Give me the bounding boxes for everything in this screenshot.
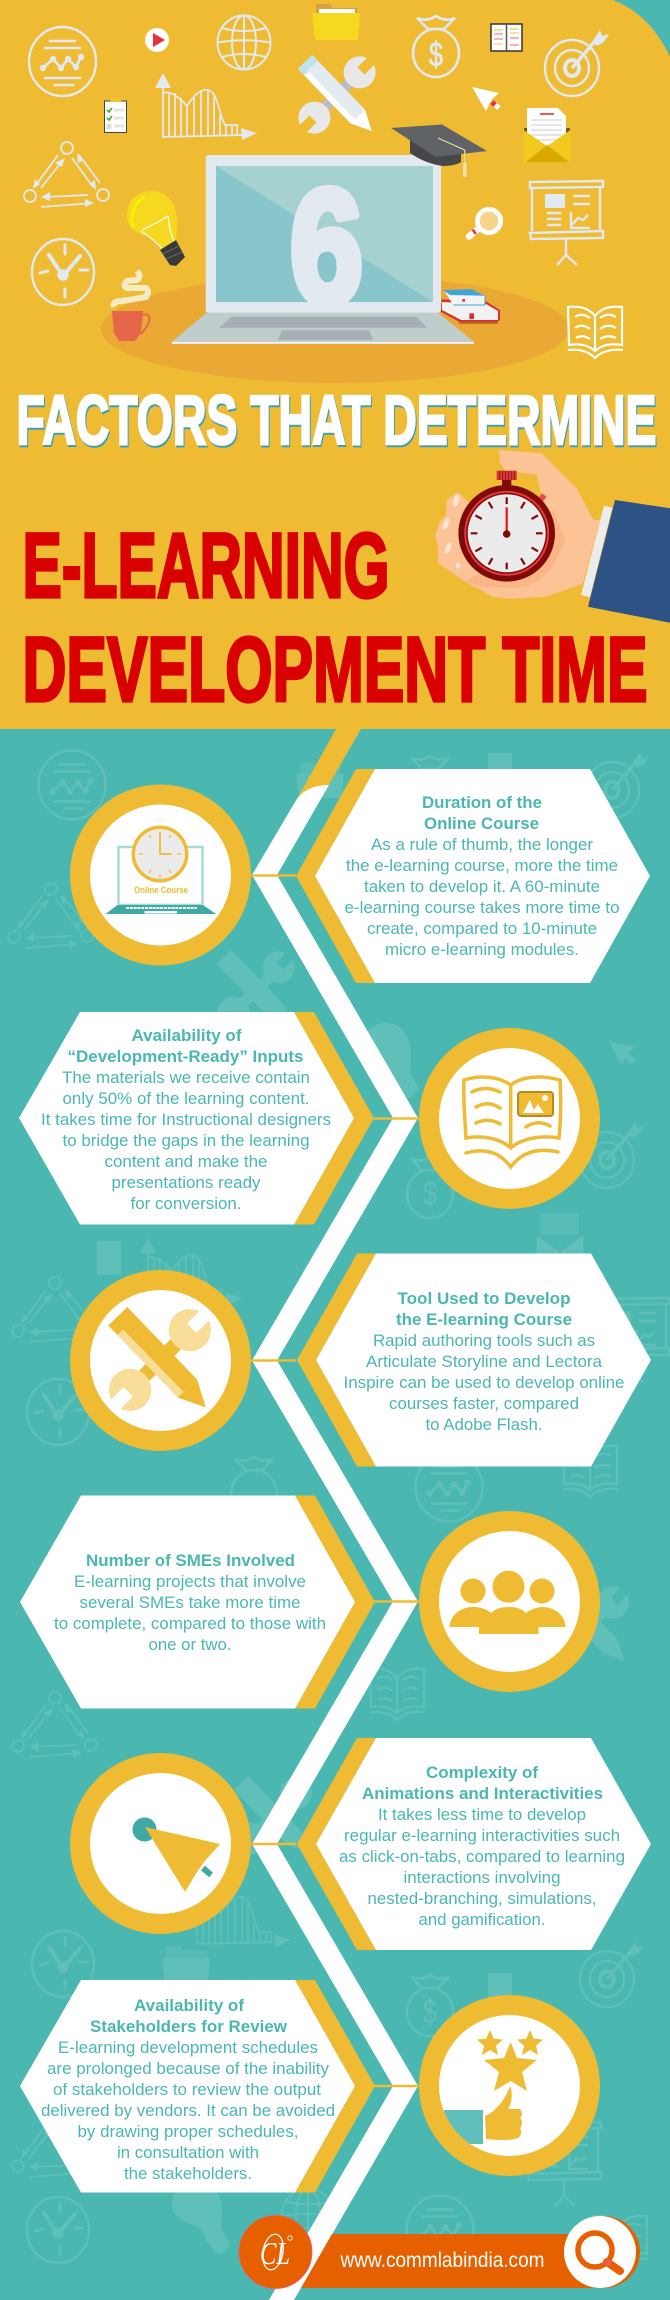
heading: Number of SMEs Involved	[86, 1551, 295, 1570]
icon: open book	[568, 307, 623, 358]
people	[450, 1571, 566, 1634]
icon: globe	[218, 16, 270, 70]
hexagon accent	[295, 1980, 375, 2192]
icon: light bulb	[127, 191, 185, 266]
heading: Duration of the	[422, 793, 542, 812]
body text	[339, 1805, 625, 1929]
book	[464, 1077, 561, 1167]
icon circle: stars and thumbs up	[419, 1995, 600, 2176]
footer url bar	[301, 2216, 640, 2288]
body text: e-learning course takes more time to	[344, 898, 620, 917]
body text: The materials we receive contain	[62, 1068, 310, 1087]
panel: tool used to develop	[297, 1254, 651, 1466]
icon circle: people	[419, 1511, 600, 1692]
heading: Online Course	[424, 814, 539, 833]
laptop with number six	[172, 155, 474, 344]
body text: micro e-learning modules.	[385, 940, 579, 959]
icon circle: wrench and pencil	[70, 1270, 251, 1451]
orange bar	[301, 2234, 604, 2288]
body text: and gamification.	[418, 1910, 546, 1929]
icon: cursor	[472, 87, 499, 111]
body text: in consultation with	[117, 2143, 259, 2162]
icon: planner	[491, 24, 522, 51]
hexagon accent	[294, 1012, 374, 1224]
body text: by drawing proper schedules,	[78, 2122, 298, 2141]
body text: are prolonged because of the inability	[47, 2059, 329, 2078]
background ghost icons	[8, 750, 669, 2267]
heading: Availability of	[134, 1996, 244, 2015]
thumbs up	[485, 2086, 522, 2140]
body text: E-learning development schedules	[58, 2038, 318, 2057]
body text: content and make the	[104, 1152, 268, 1171]
cursor arrow	[145, 1827, 220, 1892]
heading: Animations and Interactivities	[362, 1784, 603, 1803]
hexagon accent	[297, 1738, 376, 1950]
laptop frame	[206, 155, 441, 313]
hexagon body	[20, 1980, 355, 2192]
heading: the E-learning Course	[396, 1310, 572, 1329]
body text: only 50% of the learning content.	[62, 1089, 310, 1108]
icon: target	[545, 30, 609, 96]
hexagon body	[20, 1496, 355, 1708]
stars	[477, 2030, 543, 2091]
body text: regular e-learning interactivities such	[344, 1826, 620, 1845]
body text: E-learning projects that involve	[74, 1572, 306, 1591]
picture	[518, 1092, 553, 1116]
icon: chart circle	[29, 27, 96, 96]
ring	[419, 1028, 600, 1209]
heading	[422, 793, 542, 833]
ground ellipse	[101, 275, 569, 383]
icon: hand with stopwatch	[435, 450, 670, 623]
icon: play button	[145, 28, 169, 52]
icon: graduation cap	[391, 124, 487, 177]
icon circle: cursor	[70, 1753, 251, 1934]
background ghost icons: $	[423, 1175, 437, 1213]
panel: development-ready inputs	[19, 1012, 374, 1224]
stopwatch hand	[506, 507, 508, 533]
fingernails	[441, 494, 461, 569]
icon: network triangle	[24, 142, 109, 207]
body text: to complete, compared to those with	[54, 1614, 326, 1633]
body text: Inspire can be used to develop online	[344, 1373, 624, 1392]
icon: wrench and pencil	[292, 50, 382, 140]
heading	[68, 1026, 304, 1066]
corner teal accent	[613, 0, 670, 57]
clock	[132, 826, 188, 882]
icon circle: online course clock	[70, 784, 251, 966]
body text	[344, 1331, 624, 1434]
commlab logo	[239, 2216, 312, 2288]
body text: to bridge the gaps in the learning	[62, 1131, 310, 1150]
body text: nested-branching, simulations,	[368, 1889, 596, 1908]
hexagon body	[315, 769, 650, 983]
icon circle: open book	[419, 1028, 600, 1209]
heading: Tool Used to Develop	[398, 1289, 570, 1308]
icon: magnifier	[469, 209, 501, 236]
body text: Rapid authoring tools such as	[373, 1331, 595, 1350]
body text: delivered by vendors. It can be avoided	[41, 2101, 335, 2120]
tools	[101, 1301, 219, 1419]
body text: It takes time for Instructional designers	[41, 1110, 331, 1129]
touchpad	[278, 330, 373, 340]
body text: as click-on-tabs, compared to learning	[339, 1847, 625, 1866]
panel: stakeholders for review	[20, 1980, 375, 2192]
icon: clock	[32, 239, 94, 305]
laptop screen	[216, 166, 433, 302]
heading	[362, 1763, 603, 1803]
commlab logo: CL	[260, 2235, 290, 2271]
title: e-learning: E-LEARNING	[22, 515, 390, 617]
hexagon body	[316, 1738, 651, 1950]
body text	[54, 1572, 326, 1654]
heading: Complexity of	[426, 1763, 538, 1782]
hexagon body	[316, 1254, 651, 1466]
keyboard	[219, 317, 427, 328]
body text: the e-learning course, more the time	[346, 856, 618, 875]
palm shadow	[465, 510, 565, 588]
body text: to Adobe Flash.	[426, 1415, 542, 1434]
icon: coffee mug	[112, 271, 149, 341]
icon: money bag	[413, 16, 459, 77]
label: Online Course	[134, 885, 188, 895]
stopwatch button	[539, 493, 546, 501]
cursor tail	[196, 1862, 224, 1887]
body text: of stakeholders to review the output	[53, 2080, 321, 2099]
body text: courses faster, compared	[389, 1394, 579, 1413]
icon: envelope	[524, 108, 570, 162]
shirt cuff	[444, 2110, 483, 2144]
hexagon body	[19, 1012, 354, 1224]
icon: presentation board	[530, 181, 603, 265]
hexagon accent	[297, 1254, 376, 1466]
heading: Availability of	[132, 1026, 242, 1045]
icon: folder	[312, 4, 360, 40]
jacket sleeve	[588, 500, 670, 623]
laptop screen	[118, 847, 202, 905]
stopwatch crown	[497, 471, 517, 480]
icon: growth chart	[155, 73, 257, 140]
hexagon accent	[295, 1496, 375, 1708]
body text: taken to develop it. A 60-minute	[364, 877, 600, 896]
body text	[41, 1068, 331, 1213]
white zigzag band	[252, 785, 418, 2300]
heading	[90, 1996, 288, 2036]
body text: Articulate Storyline and Lectora	[366, 1352, 603, 1371]
body text: the stakeholders.	[124, 2164, 252, 2183]
icon: money bag: $	[429, 36, 443, 74]
panel: complexity of animations	[297, 1738, 651, 1950]
heading	[396, 1289, 572, 1329]
body text: It takes less time to develop	[378, 1805, 586, 1824]
number six: 6	[290, 157, 363, 338]
stopwatch case	[458, 485, 555, 582]
heading: Stakeholders for Review	[90, 2017, 288, 2036]
body text: one or two.	[148, 1635, 232, 1654]
body text: interactions involving	[404, 1868, 560, 1887]
background ghost icons: $	[423, 1993, 437, 2031]
connector lines	[251, 876, 419, 2086]
ring	[70, 784, 251, 966]
magnifier icon	[578, 2233, 620, 2271]
icon: stacked books	[441, 289, 500, 324]
body text: create, compared to 10-minute	[367, 919, 597, 938]
body text: As a rule of thumb, the longer	[371, 835, 593, 854]
body text	[41, 2038, 335, 2183]
ring	[70, 1270, 251, 1451]
panel: number of smes involved	[20, 1496, 375, 1708]
ring	[419, 1511, 600, 1692]
dot	[132, 1818, 156, 1842]
ring	[70, 1753, 251, 1934]
hand	[435, 450, 600, 599]
panel: duration of the online course	[296, 769, 650, 983]
search circle	[568, 2216, 640, 2288]
laptop base	[172, 313, 474, 342]
url text: www.commlabindia.com	[340, 2249, 544, 2272]
header yellow panel	[0, 0, 670, 729]
body text	[344, 835, 620, 959]
body text: several SMEs take more time	[80, 1593, 300, 1612]
shirt cuff	[581, 506, 612, 597]
stopwatch face	[468, 494, 546, 572]
laptop base	[106, 905, 216, 914]
hexagon accent	[296, 769, 375, 983]
icon: clipboard checklist	[104, 98, 126, 132]
heading: “Development-Ready” Inputs	[68, 1047, 304, 1066]
body text: for conversion.	[130, 1194, 242, 1213]
yellow band top	[292, 729, 361, 808]
ring	[419, 1995, 600, 2176]
body text: presentations ready	[112, 1173, 261, 1192]
